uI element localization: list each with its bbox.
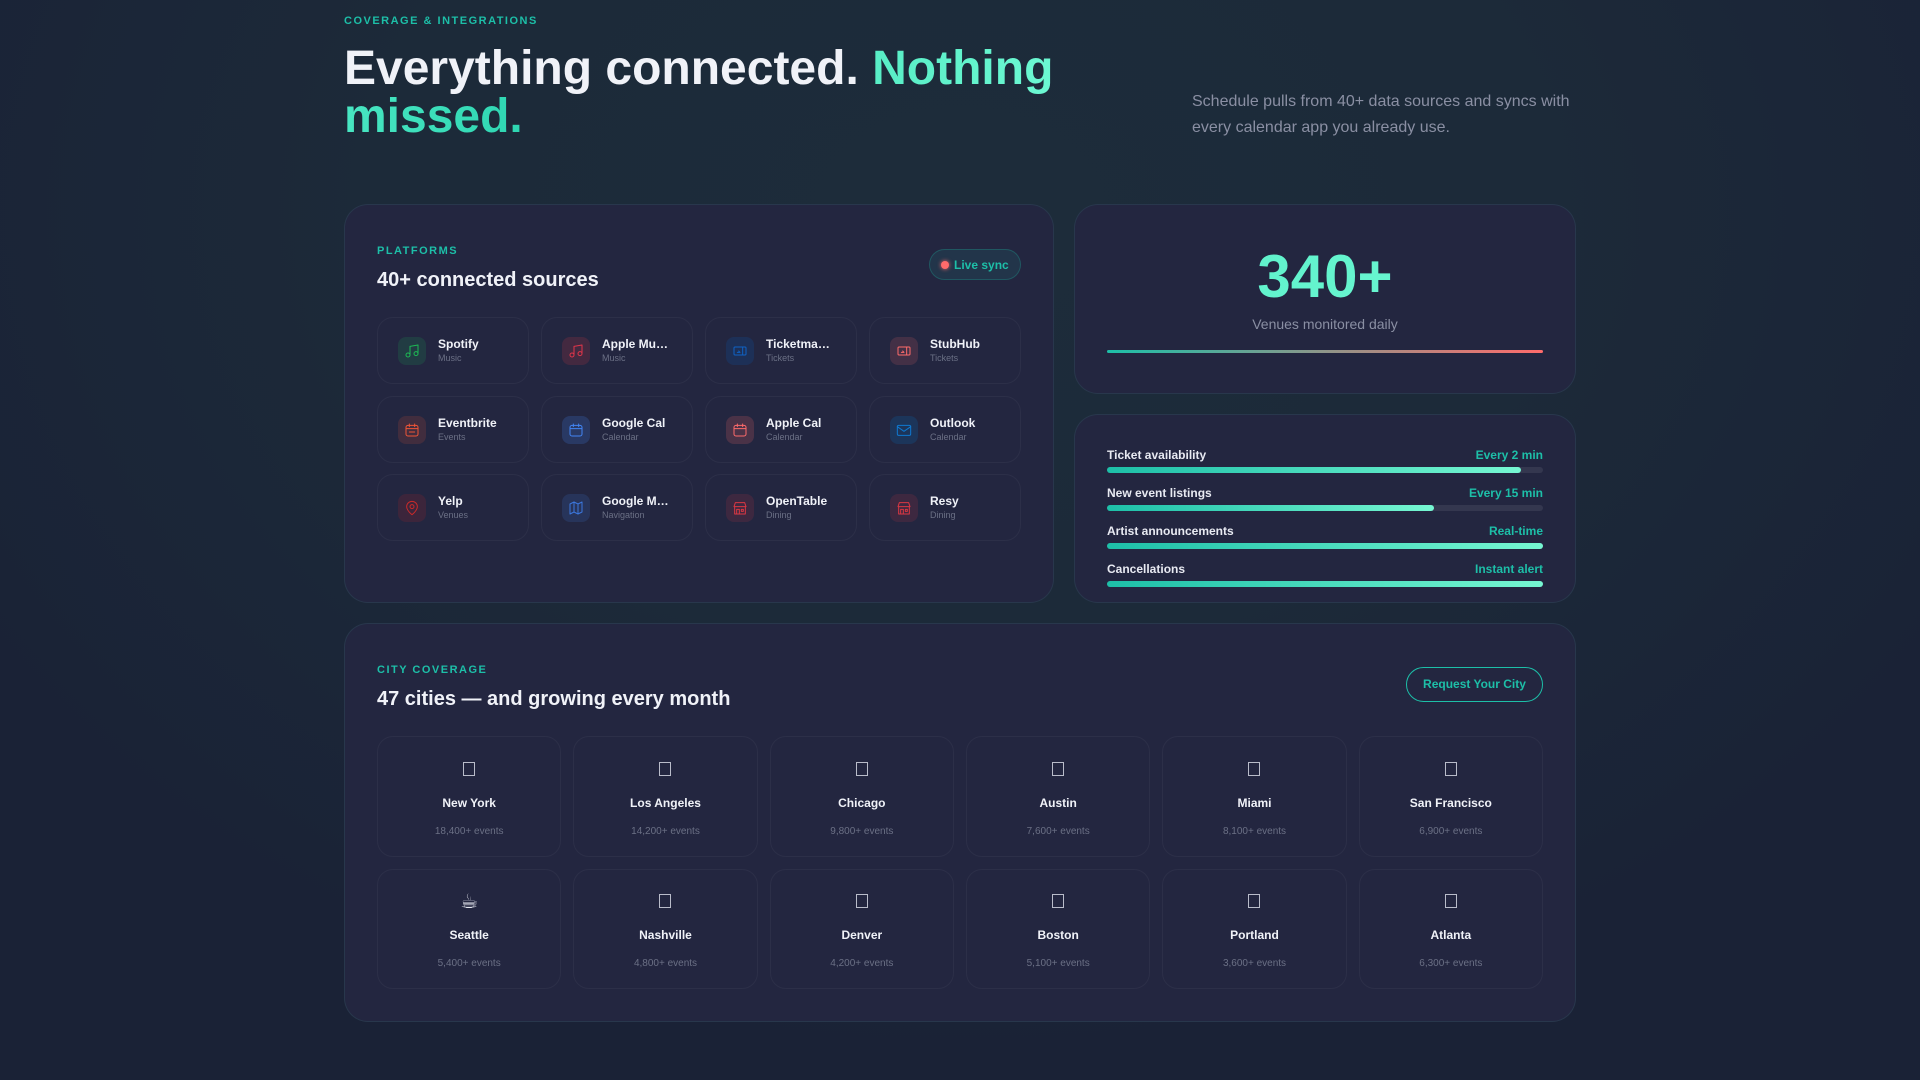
city card: Miami: 8,100+ events: [1223, 826, 1286, 837]
city card: Denver: 4,200+ events: [830, 958, 893, 968]
city card: Austin: 7,600+ events: [1027, 826, 1090, 837]
platform card: Apple Music: [541, 317, 693, 384]
platform card: OpenTable: OpenTable: [766, 494, 827, 508]
live sync badge: [929, 249, 1021, 280]
stat number: 340+: [1257, 243, 1393, 310]
icon: calendar: [726, 416, 754, 444]
city card: San Francisco: San Francisco: [1410, 796, 1492, 810]
icon: calendar: [562, 416, 590, 444]
platform card: Yelp: Yelp: [438, 494, 463, 508]
city card: Austin: Austin: [1039, 796, 1077, 810]
city card: Portland: 3,600+ events: [1223, 958, 1286, 968]
platform card: Resy: [869, 474, 1021, 541]
city card: Nashville: [573, 868, 758, 989]
platform card: Eventbrite: Eventbrite: [438, 416, 497, 430]
row: cancellations: [1107, 562, 1543, 587]
icon: music note: [562, 337, 590, 365]
status dot: [941, 261, 949, 269]
platform card: StubHub: StubHub: [930, 337, 980, 351]
row: ticket availability: [1107, 448, 1543, 473]
platform card: Apple Cal: Apple Cal: [766, 416, 821, 430]
city card: Denver: Denver: [841, 928, 882, 942]
city card: Seattle: 5,400+ events: [438, 958, 501, 968]
city card: Seattle: Seattle: [449, 928, 489, 942]
row: cancellations: Cancellations: [1107, 562, 1185, 576]
city card: New York: [377, 736, 561, 856]
row: new event listings: [1107, 486, 1543, 511]
platform card: Outlook: Calendar: [930, 432, 967, 442]
city card: Nashville: Nashville: [639, 928, 692, 942]
city card: Los Angeles: [573, 736, 758, 856]
eyebrow: coverage and integrations: COVERAGE & INTEGRATIONS: [344, 15, 538, 27]
row: ticket availability: Every 2 min: [1476, 448, 1543, 462]
city card: Miami: Miami: [1237, 796, 1272, 810]
platform card: Outlook: Outlook: [930, 416, 975, 430]
progress bar 75%: [1107, 505, 1543, 511]
city card: Austin: [966, 736, 1150, 856]
city card: New York: 18,400+ events: [435, 826, 504, 837]
icon: map: [562, 494, 590, 522]
progress bar 95%: [1107, 467, 1543, 473]
platform card: Apple Cal: Calendar: [766, 432, 803, 442]
platform card: Google Maps: [541, 474, 693, 541]
row: new event listings: New event listings: [1107, 486, 1212, 500]
badge text: Live sync: [954, 258, 1009, 272]
icon: store: [890, 494, 918, 522]
panel: sync frequency: [1074, 414, 1576, 603]
platform card: StubHub: [869, 317, 1021, 384]
request your city button: Request Your City: [1423, 677, 1526, 691]
platform card: Resy: Dining: [930, 510, 956, 520]
city card: Chicago: Chicago: [838, 796, 885, 810]
icon: ticket: [890, 337, 918, 365]
stat label: Venues monitored daily: [1252, 316, 1398, 332]
platform card: Ticketmaster: Tickets: [766, 353, 794, 363]
platforms label: PLATFORMS: [377, 245, 458, 257]
platform card: Eventbrite: [377, 396, 529, 463]
city card: Seattle: [377, 868, 561, 989]
progress bar 100%: [1107, 581, 1543, 587]
platform card: Google Cal: [541, 396, 693, 463]
city card: San Francisco: [1359, 736, 1543, 856]
city card: New York: New York: [442, 796, 496, 810]
city card: Portland: [1162, 868, 1347, 989]
city card: Miami: [1162, 736, 1347, 856]
row: artist announcements: [1107, 524, 1543, 549]
platform card: Resy: Resy: [930, 494, 959, 508]
platform card: Google Maps: Navigation: [602, 510, 645, 520]
city card: Atlanta: [1359, 868, 1543, 989]
icon: calendar: [398, 416, 426, 444]
platform card: Apple Music: Apple Music: [602, 337, 672, 351]
platform card: Spotify: Spotify: [438, 337, 479, 351]
request your city button: [1406, 667, 1543, 702]
icon: music note: [398, 337, 426, 365]
city card: Chicago: [770, 736, 954, 856]
title: Everything connected. Nothing missed.: [344, 42, 1053, 143]
platform card: Apple Cal: [705, 396, 857, 463]
city coverage heading: 47 cities — and growing every month: [377, 688, 730, 710]
panel: platforms: [344, 204, 1054, 603]
panel: venues stat: [1074, 204, 1576, 394]
platform card: Spotify: Music: [438, 353, 462, 363]
city card: Boston: [966, 868, 1150, 989]
city card: Chicago: 9,800+ events: [830, 826, 893, 837]
icon: store: [726, 494, 754, 522]
progress bar 100%: [1107, 543, 1543, 549]
city card: Los Angeles: Los Angeles: [630, 796, 701, 810]
city card: Denver: [770, 868, 954, 989]
platform card: StubHub: Tickets: [930, 353, 958, 363]
city card: Atlanta: Atlanta: [1430, 928, 1471, 942]
row: new event listings: Every 15 min: [1469, 486, 1543, 500]
row: artist announcements: Real-time: [1489, 524, 1543, 538]
platform card: Apple Music: Music: [602, 353, 626, 363]
city card: Atlanta: 6,300+ events: [1419, 958, 1482, 968]
icon: ticket: [726, 337, 754, 365]
platforms heading: 40+ connected sources: [377, 269, 599, 291]
city card: San Francisco: 6,900+ events: [1419, 826, 1482, 837]
platform card: Spotify: [377, 317, 529, 384]
city coverage label: CITY COVERAGE: [377, 664, 487, 676]
platform card: Google Cal: Google Cal: [602, 416, 665, 430]
city card: Los Angeles: 14,200+ events: [631, 826, 700, 837]
panel: city coverage: [344, 623, 1576, 1022]
icon: mail: [890, 416, 918, 444]
row: ticket availability: Ticket availability: [1107, 448, 1206, 462]
platform card: Outlook: [869, 396, 1021, 463]
gradient divider: [1107, 350, 1543, 353]
platform card: Ticketmaster: [705, 317, 857, 384]
platform card: Google Cal: Calendar: [602, 432, 639, 442]
icon: map pin: [398, 494, 426, 522]
platform card: Yelp: Venues: [438, 510, 468, 520]
intro text: Schedule pulls from 40+ data sources and syncs with every calendar app you already use.: [1192, 93, 1570, 136]
city card: Nashville: 4,800+ events: [634, 958, 697, 968]
row: cancellations: Instant alert: [1475, 562, 1543, 576]
row: artist announcements: Artist announcements: [1107, 524, 1234, 538]
platform card: Eventbrite: Events: [438, 432, 466, 442]
platform card: OpenTable: [705, 474, 857, 541]
city card: Seattle: ☕: [460, 890, 478, 912]
city card: Portland: Portland: [1230, 928, 1279, 942]
platform card: OpenTable: Dining: [766, 510, 792, 520]
platform card: Yelp: [377, 474, 529, 541]
city card: Boston: 5,100+ events: [1027, 958, 1090, 968]
city card: Boston: Boston: [1038, 928, 1079, 942]
